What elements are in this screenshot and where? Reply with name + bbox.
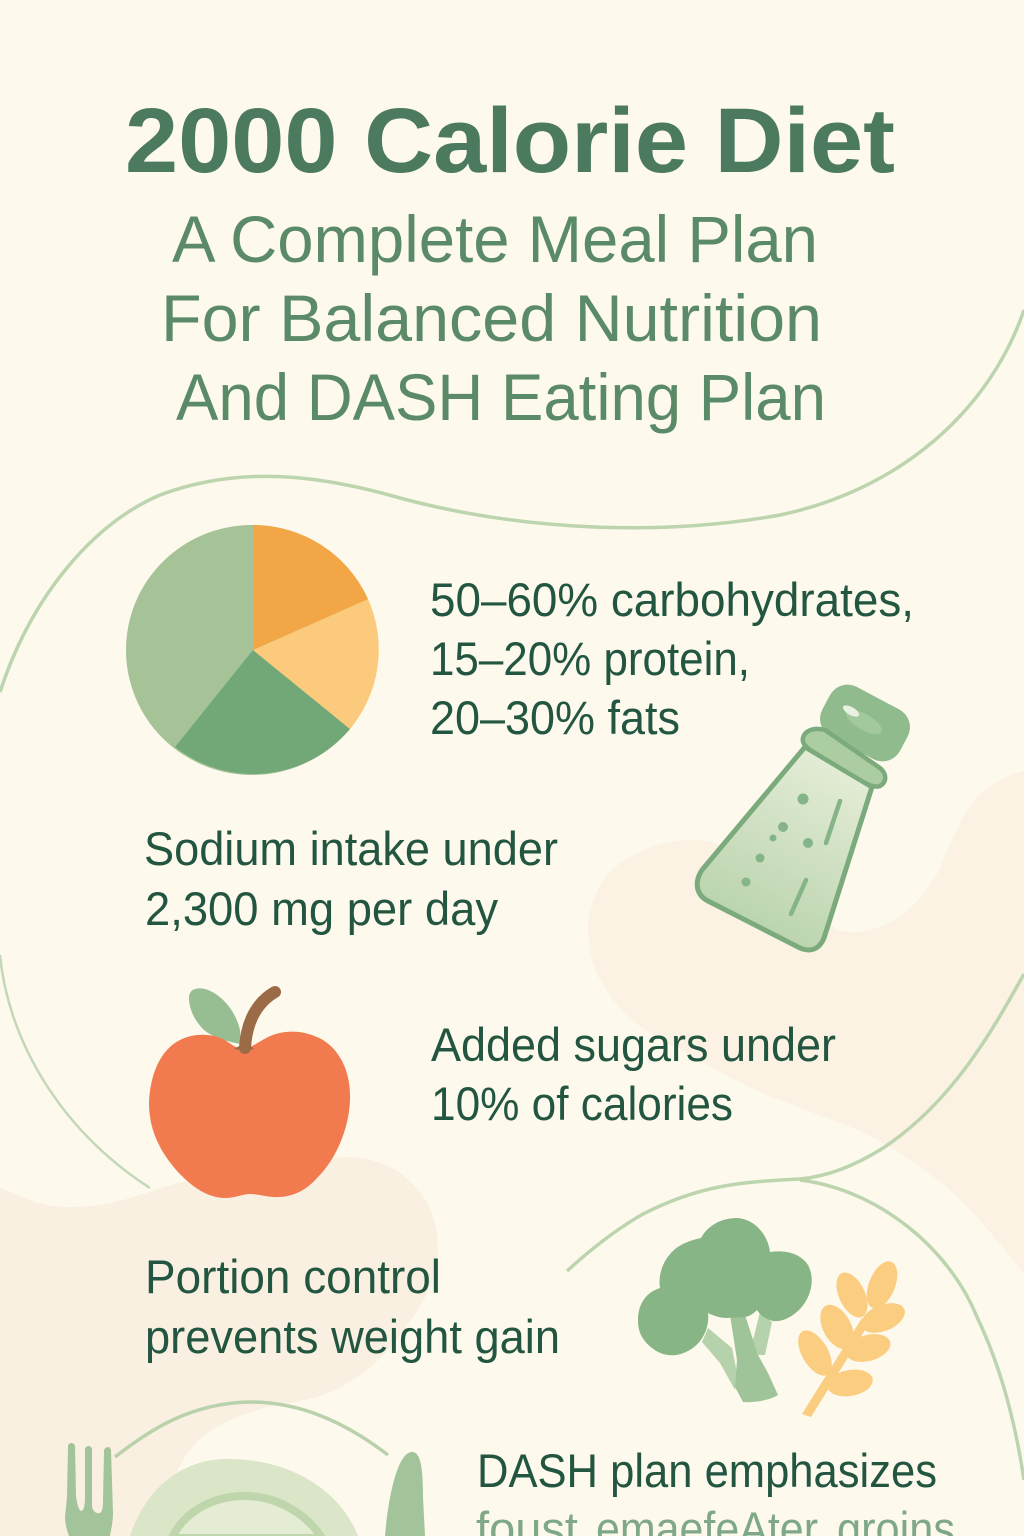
subtitle: A Complete Meal Plan [172,202,818,276]
text: DASH plan [476,1444,955,1536]
text: added sugars: Added sugars under [431,1018,836,1071]
decorative curve: left arc [0,955,150,1188]
text: DASH plan: DASH plan emphasizes [477,1444,937,1497]
text: sodium [144,822,558,935]
text: macronutrient ranges: 50–60% carbohydrates, [430,573,914,626]
text: sodium: 2,300 mg per day [145,882,498,935]
text: added sugars: 10% of calories [431,1077,733,1130]
decorative curve: lower right wave [567,974,1024,1271]
text: sodium: Sodium intake under [144,822,558,875]
subtitle [161,202,826,434]
text: macronutrient ranges: 20–30% fats [430,691,680,744]
icon: salt shaker [697,678,917,950]
text: portion control: prevents weight gain [145,1310,560,1363]
decorative curve: lower right arc [800,1180,1024,1480]
text: macronutrient ranges: 15–20% protein, [430,632,750,685]
background blob: right [588,771,1024,1274]
subtitle: And DASH Eating Plan [176,360,826,434]
text: macronutrient ranges [430,573,914,744]
text: portion control: Portion control [145,1250,441,1303]
title: 2000 Calorie Diet [125,90,895,192]
icon: wheat sprig [791,1257,909,1417]
background blob: bottom left [0,1157,438,1536]
text: portion control [145,1250,560,1363]
decorative curve: top wave [0,310,1024,692]
subtitle: For Balanced Nutrition [161,281,822,355]
icon: apple [149,988,350,1198]
pie chart: macronutrients [126,525,379,775]
icon: broccoli [638,1218,812,1402]
icon: place setting [65,1402,425,1536]
text: added sugars [431,1018,836,1130]
